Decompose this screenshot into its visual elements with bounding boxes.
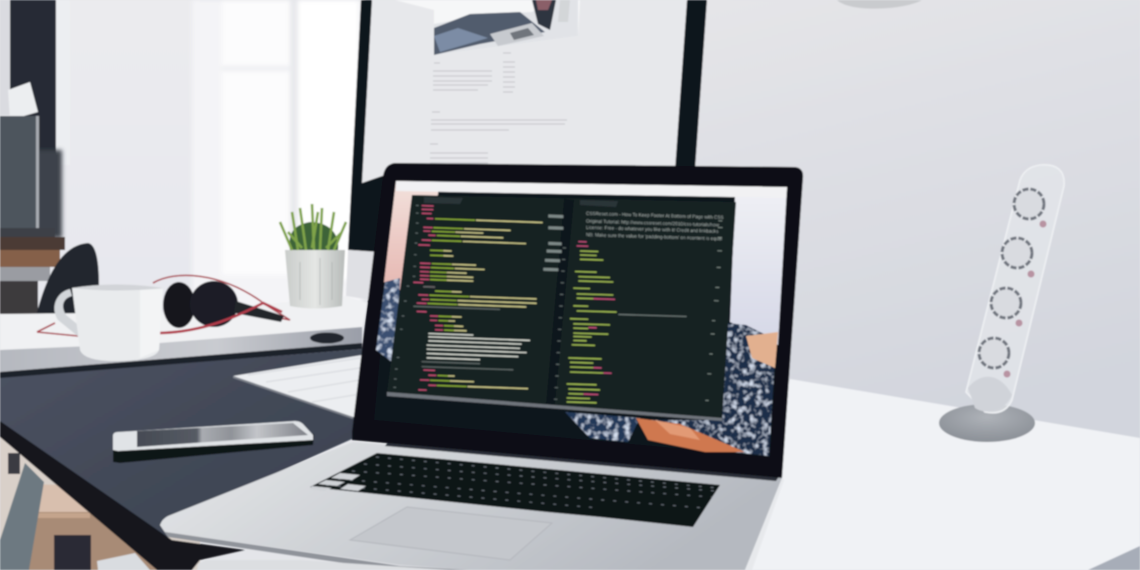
right pane header comments bbox=[586, 211, 724, 241]
right pane header comments: Original Tutorial: http://www.cssreset.com/2010/css-tutorials/how bbox=[586, 219, 720, 228]
right pane header comments: NB: Make sure the value for 'padding-bottom' on #content is equal bbox=[586, 232, 722, 241]
right pane header comments: License: Free - do whatever you like with it! Credit and linkbacks bbox=[586, 225, 719, 234]
headphones bbox=[160, 281, 284, 333]
dark desk surface bbox=[0, 349, 372, 570]
code editor window bbox=[387, 181, 787, 421]
left mountain bbox=[376, 278, 400, 365]
under-desk area with cardboard box and leg bbox=[0, 430, 200, 570]
plant in metal pot bbox=[280, 204, 346, 308]
back-left corner: dark panel, old monitor, shelf and chair bbox=[0, 0, 99, 321]
laptop base bbox=[160, 440, 784, 570]
desk: right white surface bbox=[700, 379, 1140, 570]
right pane header comments: CSSReset.com - How To Keep Footer At Bottom of Page with CSS bbox=[586, 211, 724, 220]
window bbox=[192, 0, 362, 310]
code lines: right pane bbox=[554, 210, 724, 407]
coffee mug bbox=[54, 284, 163, 361]
red cable bbox=[37, 275, 290, 336]
background wall bbox=[0, 0, 1140, 450]
smartphone bbox=[113, 421, 314, 463]
monitor bbox=[346, 0, 707, 300]
desk speaker bbox=[939, 165, 1064, 442]
speaker base bbox=[939, 404, 1035, 442]
trackpad bbox=[350, 507, 552, 560]
speaker tube bbox=[966, 165, 1064, 413]
wallpaper bbox=[374, 181, 787, 457]
wireless keyboard bbox=[233, 355, 362, 419]
desk front edge bbox=[0, 421, 245, 570]
keyboard bbox=[310, 453, 720, 527]
right mountain bbox=[640, 323, 776, 456]
ceiling lamp bbox=[837, 0, 922, 9]
hinge bbox=[385, 440, 782, 481]
desk puck bbox=[310, 332, 344, 344]
speaker drivers bbox=[979, 189, 1044, 368]
table leg bbox=[0, 463, 44, 570]
desk: white upper surface bbox=[0, 296, 367, 379]
monitor screen picture bbox=[395, 0, 580, 55]
laptop lid bbox=[352, 163, 803, 478]
code lines: left pane bbox=[393, 205, 563, 395]
